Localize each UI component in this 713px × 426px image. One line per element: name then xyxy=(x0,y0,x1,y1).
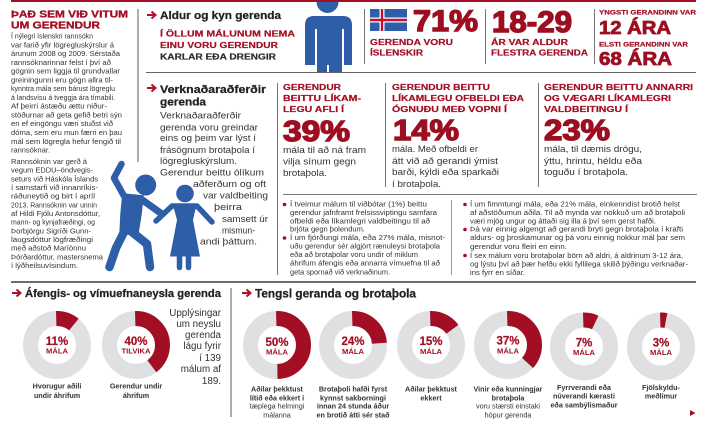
title xyxy=(11,10,128,32)
heading: methods: gerenda xyxy=(160,96,207,108)
text block: study description: rannsóknarinnar felst í því að xyxy=(11,58,111,67)
icon: male figure xyxy=(305,0,352,72)
arrow xyxy=(147,84,156,92)
donut: 11 percent: 11% xyxy=(46,336,68,348)
donut: 11 percent: MÁLA xyxy=(46,346,68,356)
stat: 71 percent Icelandic: GERENDA VORU xyxy=(370,37,453,47)
donut: 24 percent: innan 24 stunda áður xyxy=(317,402,389,410)
text block: left bullets: gerendur jafnframt frelsissviptingu samfara xyxy=(290,210,437,217)
panel: other force 23 percent: ýttu, hrintu, héldu eða xyxy=(544,155,643,166)
donut: 11 percent xyxy=(30,318,84,400)
text block: study description: árunum 2008 og 2009. Sérstaða xyxy=(11,49,120,58)
panel: physical force 39 percent: 39% xyxy=(283,116,350,148)
text block: left bullets: uðu gerendur sér algjört rænuleysi brotaþola xyxy=(290,243,440,251)
text block: right bullets: og lýstu því að þær hefðu ekki fyllilega skilið þýðingu verknaðar- xyxy=(470,260,689,268)
panel: physical force 39 percent: LEGU AFLI Í xyxy=(283,104,345,114)
donut: 40 percent: 40% xyxy=(124,336,148,348)
donut: 7 percent: MÁLA xyxy=(573,348,595,357)
donut: 3 percent xyxy=(634,320,688,400)
donut: 50 percent: MÁLA xyxy=(266,348,288,356)
donut: 11 percent: undir áhrifum xyxy=(34,391,80,400)
text block: data note: í 139 xyxy=(199,353,221,364)
text block: right bullets: Í sex málum voru brotaþolar börn að aldri, á aldrinum 3-12 ára, xyxy=(470,251,683,260)
donut: 3 percent: meðlimur xyxy=(645,392,677,400)
callout: all but one were male: KARLAR EÐA DRENGIR xyxy=(160,52,277,62)
icon: continuation triangle xyxy=(690,410,696,416)
text block: study description: stöðurnar að geta gefið betri sýn xyxy=(11,110,122,120)
text block: data note: um neyslu xyxy=(176,319,221,330)
donut: 37 percent: 37% xyxy=(496,336,520,348)
text block: study description: ráðuneytið og birt í apríl xyxy=(11,192,95,201)
donut: 3 percent: 3% xyxy=(653,338,669,350)
heading: alcohol and drug use: Áfengis- og vímuefnaneysla gerenda xyxy=(25,287,222,300)
callout: all but one were male xyxy=(160,28,295,62)
panel: physical force 39 percent xyxy=(283,82,366,178)
text block: study description: en ef eingöngu væri stuðst við xyxy=(11,119,113,128)
text block: right bullets: Þá var einnig algengt að gerandi bryti gegn brotaþola í krafti xyxy=(470,226,684,234)
panel: relationship xyxy=(242,286,688,420)
panel: violence or threat 14 percent: átt við að gerandi ýmist xyxy=(392,155,498,166)
stat: age 18-29: 18-29 xyxy=(492,6,572,39)
text block: study description: Af þeirri ástæðu ættu niður- xyxy=(11,102,108,111)
text block: study description: mál sem lögregla hefur fengið til xyxy=(11,137,121,146)
stat: youngest and oldest: YNGSTI GERANDINN VAR xyxy=(599,10,696,16)
panel: other force 23 percent: 23% xyxy=(544,115,610,147)
text block: right bullets: gerendur voru fleiri en einn. xyxy=(470,244,567,251)
heading: methods xyxy=(160,84,267,108)
donut: 40 percent: TILVIKA xyxy=(122,346,151,356)
donut: 50 percent xyxy=(250,318,305,420)
text block: study description: með aðstoð Maríönnu xyxy=(11,244,86,253)
text block: study description: dóma, sem eru mun færri en þau xyxy=(11,128,122,137)
panel: age and gender xyxy=(147,10,295,62)
text block: study description: af Hildi Fjólu Antonsdóttur, xyxy=(11,209,100,218)
stat: youngest and oldest: 12 ÁRA xyxy=(599,17,671,38)
title: UM GERENDUR xyxy=(11,20,101,32)
donut: 7 percent: núverandi kærasti xyxy=(553,392,615,400)
stat: youngest and oldest: 68 ÁRA xyxy=(599,48,672,69)
panel: violence or threat 14 percent: 14% xyxy=(393,115,459,147)
text block: right bullets xyxy=(463,200,689,277)
text block: study description: kynntra mála sem bárust lögreglu xyxy=(11,84,115,93)
callout: all but one were male: EINU VORU GERENDUR xyxy=(160,40,279,50)
text block: left bullets: eða að brotaþolar voru undir of miklum xyxy=(290,251,418,259)
donut: 24 percent xyxy=(316,318,390,420)
text block: left bullets: Í tveimur málum til viðbótar (1%) beittu xyxy=(290,200,427,208)
text block: methods description: þeirra xyxy=(214,201,243,212)
text block: left bullets: ofbeldi eða líkamlegri valdbeitingu til að xyxy=(290,217,430,225)
donut: 40 percent: Gerendur undir xyxy=(110,382,162,390)
text block: study description: seturs við Háskóla Íslands xyxy=(11,174,98,183)
heading: age and gender: Aldur og kyn gerenda xyxy=(160,10,282,22)
text block: left bullets xyxy=(283,200,446,276)
panel: alcohol and drug use xyxy=(12,287,222,400)
stat: youngest and oldest: ELSTI GERANDINN VAR xyxy=(599,42,688,48)
panel: physical force 39 percent: BEITTU LÍKAM- xyxy=(283,93,361,103)
donut: 50 percent: Aðilar þekktust xyxy=(251,384,304,394)
text block: study description: í samstarfi við innanríkis- xyxy=(11,183,99,192)
text block: data note: málum af xyxy=(181,364,221,375)
panel: violence or threat 14 percent xyxy=(392,82,524,189)
text block: data note: 189. xyxy=(202,376,221,387)
heading: relationship: Tengsl geranda og brotaþola xyxy=(255,286,416,300)
callout: all but one were male: Í ÖLLUM MÁLUNUM NEMA xyxy=(160,28,295,38)
text block: methods description: var valdbeiting xyxy=(203,190,268,200)
donut: 50 percent: tæplega helmingi xyxy=(250,402,305,410)
donut: 37 percent: hópur gerenda xyxy=(485,410,531,420)
donut: 15 percent xyxy=(404,318,458,402)
text block: methods description: frásögnum brotaþola í xyxy=(160,144,255,155)
panel: other force 23 percent: OG VÆGARI LÍKAMLEGRI xyxy=(544,93,671,103)
text block: study description: vegum EDDU–öndvegis- xyxy=(11,166,94,175)
text block: right bullets: Í um fimmtungi mála, eða 21% mála, einkenndist brotið helst xyxy=(470,200,680,208)
text block: study description: 2013. Rannsóknin var unnin xyxy=(11,200,97,209)
panel: other force 23 percent: mála, til dæmis drógu, xyxy=(544,143,642,154)
text block: study description: Þorbjörgu Sigríði Gunn- xyxy=(11,226,92,235)
text block: data note: Upplýsingar xyxy=(169,308,222,319)
text block: methods description: Gerendur beittu ólíkum xyxy=(160,166,264,178)
donut: 37 percent: MÁLA xyxy=(497,346,519,356)
donut: 7 percent: Fyrrverandi eða xyxy=(557,383,612,392)
donut: 37 percent: brotaþola xyxy=(492,394,525,402)
text block: methods description: andi þáttum. xyxy=(200,236,257,246)
panel: physical force 39 percent: brotaþola. xyxy=(283,167,327,178)
donut: 50 percent: málanna xyxy=(263,410,291,420)
stat: age 18-29: FLESTRA GERENDA xyxy=(491,48,588,58)
text block: methods description: gerenda voru greindar xyxy=(160,122,258,132)
panel: violence or threat 14 percent: LÍKAMLEGU OFBELDI EÐA xyxy=(392,93,524,103)
donut: 3 percent: Fjölskyldu- xyxy=(642,383,681,392)
text block: study description: rannsóknar. xyxy=(11,146,50,155)
panel: other force 23 percent: VALDBEITINGU Í xyxy=(544,104,629,114)
text block: methods description: samsett úr xyxy=(222,213,268,224)
text block: right bullets: aldurs- og þroskamunar og þá voru einnig nokkur mál þar sem xyxy=(470,235,685,242)
heading: methods: Verknaðaraðferðir xyxy=(160,84,267,96)
text block: study description: í lýðheilsuvísindum. xyxy=(11,261,78,270)
donut: 40 percent xyxy=(110,318,162,400)
donut: 37 percent xyxy=(474,318,543,420)
donut: 24 percent: MÁLA xyxy=(342,347,364,356)
arrow xyxy=(242,290,250,296)
text block: methods description: aðferðum og oft xyxy=(193,178,266,189)
donut: 15 percent: 15% xyxy=(419,336,443,348)
text block: data note: lágu fyrir xyxy=(183,341,222,352)
stat: 71 percent Icelandic xyxy=(370,5,478,58)
icon: man attacking woman xyxy=(110,164,212,268)
donut: 24 percent: en brotið átti sér stað xyxy=(316,410,390,420)
donut: 7 percent: 7% xyxy=(576,338,592,350)
panel: violence or threat 14 percent: mála. Með ofbeldi er xyxy=(392,143,478,154)
icon: Icelandic flag xyxy=(370,9,407,31)
donut: 37 percent: voru stærsti einstaki xyxy=(476,402,540,410)
arrow xyxy=(147,12,156,18)
donut: 11 percent: Hvorugur aðili xyxy=(33,382,81,390)
arrow xyxy=(12,290,20,296)
donut: 50 percent: 50% xyxy=(265,337,289,349)
text block: study description: laugsdóttur lögfræðingi xyxy=(11,235,93,244)
panel: violence or threat 14 percent: ÓGNUÐU MEÐ VOPNI Í xyxy=(392,103,508,114)
panel: violence or threat 14 percent: barði, kýldi eða sparkaði xyxy=(392,166,499,177)
text block: study description: á landsvísu á tveggja ára tímabili. xyxy=(11,93,115,102)
text block: data note xyxy=(169,308,222,387)
text block: study description: mann- og kynjafræðingi, og xyxy=(11,218,95,227)
panel: physical force 39 percent: GERENDUR xyxy=(283,82,342,92)
panel: physical force 39 percent: mála til að ná fram xyxy=(283,144,366,155)
stat: youngest and oldest xyxy=(599,10,696,69)
text block: data note: gerenda xyxy=(185,330,222,341)
text block: study description xyxy=(11,32,122,270)
donut: 15 percent: ekkert xyxy=(420,394,442,402)
donut: 7 percent xyxy=(550,320,618,410)
text block: left bullets: Í um fjórðungi mála, eða 27% mála, misnot- xyxy=(290,233,446,242)
donut: 15 percent: Aðilar þekktust xyxy=(405,384,458,394)
panel: other force 23 percent: toguðu í brotaþola. xyxy=(544,166,628,177)
stat: 71 percent Icelandic: 71% xyxy=(413,5,478,38)
text block: study description: Í nýlegri íslenskri rannsókn xyxy=(11,32,93,40)
text block: left bullets: áhrifum áfengis eða annarra vímuefna til að xyxy=(290,260,440,268)
text block: methods description: Verknaðaraðferðir xyxy=(160,110,241,120)
panel: methods xyxy=(147,84,268,246)
text block: right bullets: af aðstöðumun aðila. Til að mynda var nokkuð um að brotaþoli xyxy=(470,209,685,217)
text block: study description: gögnin sem liggja til grundvallar xyxy=(11,67,121,76)
donut: 7 percent: eða sambýlismaður xyxy=(550,400,618,410)
text block: study description: greiningunni eru gögn allra til- xyxy=(11,75,114,84)
text block: methods description: eins og þeim var lýst í xyxy=(160,132,256,143)
text block: methods description: lögregluskýrslum. xyxy=(160,155,237,166)
donut: 37 percent: Vinir eða kunningjar xyxy=(474,384,543,394)
donut: 40 percent: áhrifum xyxy=(123,391,149,400)
panel: other force 23 percent xyxy=(544,82,693,177)
donut: 24 percent: 24% xyxy=(341,336,365,348)
panel: violence or threat 14 percent: GERENDUR BEITTU xyxy=(392,82,490,92)
donut: 50 percent: lítið eða ekkert í xyxy=(250,394,305,402)
text block: left bullets: geta spornað við verknaðinum. xyxy=(290,268,390,276)
stat: age 18-29 xyxy=(491,6,588,58)
donut: 24 percent: Brotaþoli hafði fyrst xyxy=(319,384,388,394)
stat: 71 percent Icelandic: ÍSLENSKIR xyxy=(370,48,424,58)
text block: right bullets: ins fyrr en síðar. xyxy=(470,269,525,277)
text block: methods description xyxy=(160,110,268,246)
panel: intro text xyxy=(11,10,128,270)
text block: right bullets: væri mjög ungur og áttaði sig illa á því sem gerst hafði. xyxy=(470,217,656,225)
stat: age 18-29: ÁR VAR ALDUR xyxy=(491,37,569,47)
title: ÞAÐ SEM VIÐ VITUM xyxy=(11,10,128,20)
text block: methods description: mismun- xyxy=(222,224,255,236)
donut: 15 percent: MÁLA xyxy=(420,347,442,356)
text block: study description: Þórðardóttur, mastersnema xyxy=(11,252,103,261)
donut: 3 percent: MÁLA xyxy=(650,348,672,357)
text block: left bullets: brjóta gegn þolendum. xyxy=(290,227,365,234)
text block: study description: var farið yfir lögregluskýrslur á xyxy=(11,40,114,49)
donut: 24 percent: kynnst sakborningi xyxy=(320,394,386,402)
panel: physical force 39 percent: vilja sínum gegn xyxy=(283,156,356,166)
panel: violence or threat 14 percent: í brotaþola. xyxy=(392,178,441,189)
text block: study description: Rannsóknin var gerð á xyxy=(11,157,87,166)
panel: other force 23 percent: GERENDUR BEITTU ANNARRI xyxy=(544,82,693,92)
